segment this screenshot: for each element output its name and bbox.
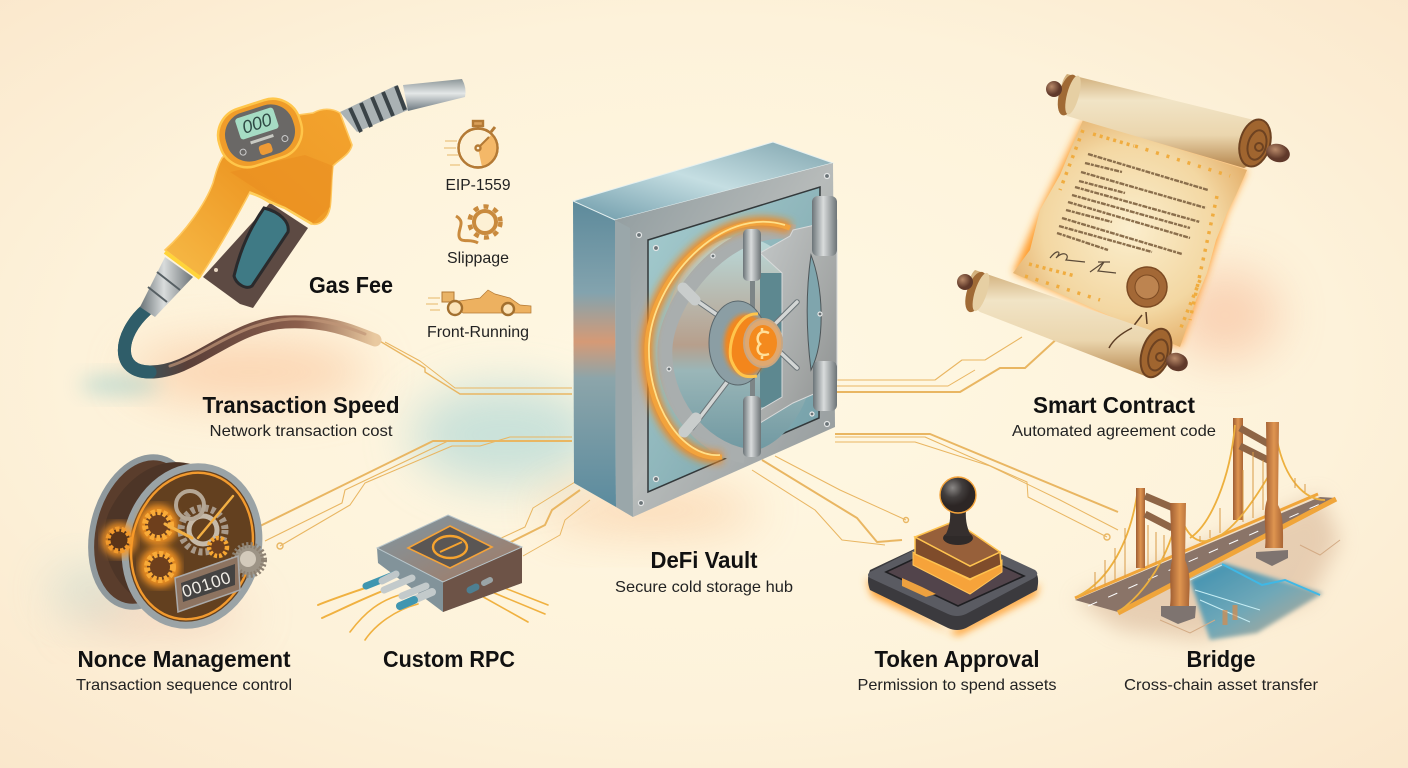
heading: gas fee: Gas Fee <box>309 272 393 298</box>
panel: gas sub-topics <box>426 121 531 341</box>
icon: vault <box>573 142 837 517</box>
vault front <box>615 163 835 517</box>
heading: DeFi vault: DeFi Vault <box>650 547 758 573</box>
background glows <box>50 270 1280 632</box>
heading: token approval: Token Approval <box>874 646 1040 672</box>
hanger lines <box>1095 452 1305 590</box>
locking window <box>760 273 782 407</box>
panel: nonce management <box>76 446 292 694</box>
central glowing hub <box>709 301 782 385</box>
top roller <box>1046 72 1292 170</box>
deck <box>1075 494 1336 613</box>
number counter: 00100 <box>180 568 233 602</box>
heading: transaction speed: Transaction Speed <box>202 392 400 418</box>
suspension cables <box>1078 425 1325 612</box>
panel: token approval <box>858 477 1056 694</box>
label: EIP-1559: EIP-1559 <box>446 177 511 194</box>
caption: permission to spend assets: Permission to spend assets <box>858 677 1056 694</box>
nozzle spout <box>340 79 466 132</box>
caption: transaction sequence control: Transaction sequence control <box>76 677 292 694</box>
stamp base <box>866 534 1040 636</box>
heading: nonce management: Nonce Management <box>78 646 291 672</box>
binary digits texture <box>1025 130 1230 330</box>
meter display: 000 <box>240 109 274 138</box>
heading: custom RPC: Custom RPC <box>383 646 515 672</box>
icon: suspension bridge <box>1075 418 1340 640</box>
icon: stopwatch <box>444 121 498 168</box>
panel: gas fee <box>124 79 466 440</box>
door recess <box>648 187 820 492</box>
orange body <box>165 109 352 278</box>
water with blue traces <box>1190 563 1323 640</box>
caption: cross-chain asset transfer: Cross-chain asset transfer <box>1124 677 1319 694</box>
icon: gear wheel with counter <box>76 446 275 640</box>
front tower <box>1136 488 1196 624</box>
wheel disc <box>664 237 816 453</box>
panel: custom RPC <box>318 515 548 672</box>
stamp blocks <box>913 521 1002 594</box>
second tower right leg <box>1256 422 1288 566</box>
glowing orange arc <box>647 222 790 457</box>
gears <box>106 491 227 582</box>
steel ring <box>665 231 795 456</box>
panel: smart contract <box>957 72 1292 440</box>
heading: smart contract: Smart Contract <box>1033 392 1195 418</box>
wires <box>318 585 548 640</box>
rear tower <box>1233 418 1272 520</box>
hose <box>124 310 375 372</box>
hinge plate <box>760 220 837 423</box>
wax seal <box>1127 267 1167 328</box>
caption: secure cold storage hub: Secure cold storage hub <box>615 579 793 596</box>
icon: race car <box>426 290 531 315</box>
spokes <box>683 288 797 432</box>
shadow under bridge <box>1075 495 1340 640</box>
trigger guard <box>203 203 308 308</box>
rear ring <box>76 446 215 618</box>
stamp handle <box>940 477 976 545</box>
vault side <box>573 201 616 507</box>
front ring <box>109 452 275 640</box>
heading: bridge: Bridge <box>1186 646 1256 672</box>
icon: RPC router with cables <box>318 515 548 640</box>
vertical bolts <box>743 229 761 457</box>
hinges <box>812 196 837 411</box>
icon: gear with slippage swirl <box>456 206 500 243</box>
metal collar <box>140 257 193 317</box>
circuit traces connecting the modules to the vault <box>255 336 1118 556</box>
panel: bridge <box>1075 418 1340 694</box>
router body <box>377 515 522 612</box>
vault top <box>573 142 833 220</box>
icon: fuel nozzle <box>124 79 466 372</box>
contract text lines <box>1057 154 1208 254</box>
panel: DeFi vault <box>573 142 837 596</box>
caption: network transaction cost: Network transaction cost <box>210 423 393 440</box>
icon: scroll <box>957 72 1292 381</box>
glowing parchment <box>1013 120 1247 347</box>
rivets <box>636 174 830 506</box>
side gear <box>234 545 264 575</box>
icon: approval stamp <box>866 477 1040 636</box>
number counter <box>175 556 240 612</box>
signatures <box>1050 252 1116 273</box>
connectors <box>366 574 490 606</box>
caption: automated agreement code: Automated agreement code <box>1012 423 1216 440</box>
meter display <box>211 91 309 175</box>
bottom roller <box>957 269 1190 381</box>
blueprint lines <box>1160 540 1340 633</box>
label: slippage: Slippage <box>447 250 509 267</box>
label: front-running: Front-Running <box>427 324 529 341</box>
clock hands <box>165 496 233 538</box>
